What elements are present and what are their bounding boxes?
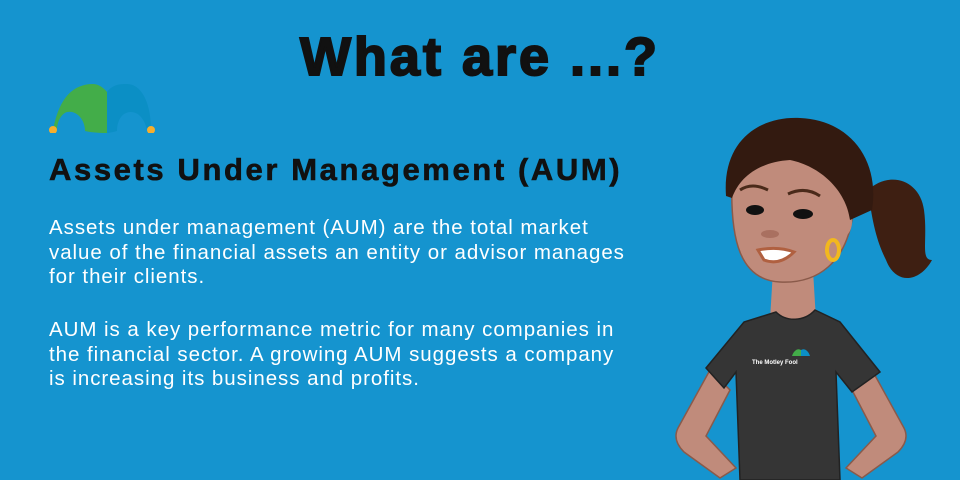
text block: significance: AUM is a key performance metric for many companies in (49, 318, 614, 341)
hair (726, 118, 873, 220)
arms (676, 370, 736, 478)
text block: definition: value of the financial assets an entity or advisor manages (49, 240, 625, 264)
shirt (706, 310, 880, 480)
illustration: woman character: The Motley Fool (752, 360, 798, 366)
ear (828, 206, 852, 238)
face (732, 140, 852, 282)
neck (770, 270, 816, 320)
title: What are ...? (300, 27, 660, 87)
text block: significance (49, 318, 614, 390)
icon: jester hat logo (49, 84, 155, 133)
illustration: woman character (675, 118, 932, 480)
eyes, nose, mouth (746, 205, 764, 215)
ponytail (868, 180, 932, 278)
text block: significance: the financial sector. A growing AUM suggests a company (49, 342, 614, 366)
earring (827, 240, 839, 260)
text block: definition: for their clients. (49, 265, 205, 288)
text block: significance: is increasing its business and profits. (49, 367, 420, 390)
text block: definition: Assets under management (AUM) are the total market (49, 216, 589, 239)
heading: Assets Under Management (AUM) (49, 152, 622, 187)
text block: definition (49, 216, 625, 288)
